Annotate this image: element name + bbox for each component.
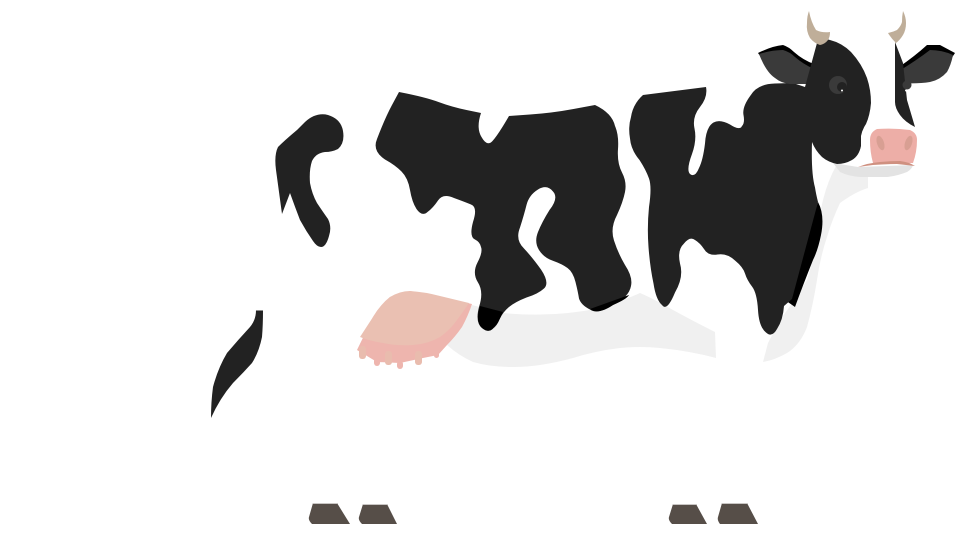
head: right face patch [895,42,915,127]
hoof: rear left [309,503,350,524]
udder [357,291,472,369]
shadow: chest and neck [763,166,868,362]
horn: left [807,11,830,45]
mouth [858,161,915,167]
teats [359,346,439,369]
tail [211,310,263,418]
spot: middle body [376,92,631,331]
nostril: right [903,135,914,151]
eye: right [902,80,912,92]
dark shading: hind bottom [590,295,629,311]
ear: right [899,45,955,83]
nose [870,129,917,163]
shadow: belly band [447,293,716,367]
udder: lower tone [357,291,472,363]
udder: upper tone [360,291,469,345]
spot: front body [629,83,830,335]
hoof: front right [718,503,758,524]
dark shading: leg bottom [478,306,503,331]
eye: left [829,76,847,94]
shadow: under jaw [833,163,913,177]
nostril: left [875,135,886,151]
hoof: front left [669,504,707,524]
spot: rump [275,114,343,247]
horn: right [888,11,906,43]
hoof: rear right [359,504,397,524]
ear: left [758,45,814,84]
head: left face patch [800,39,871,164]
shading: behind front leg [785,202,822,307]
